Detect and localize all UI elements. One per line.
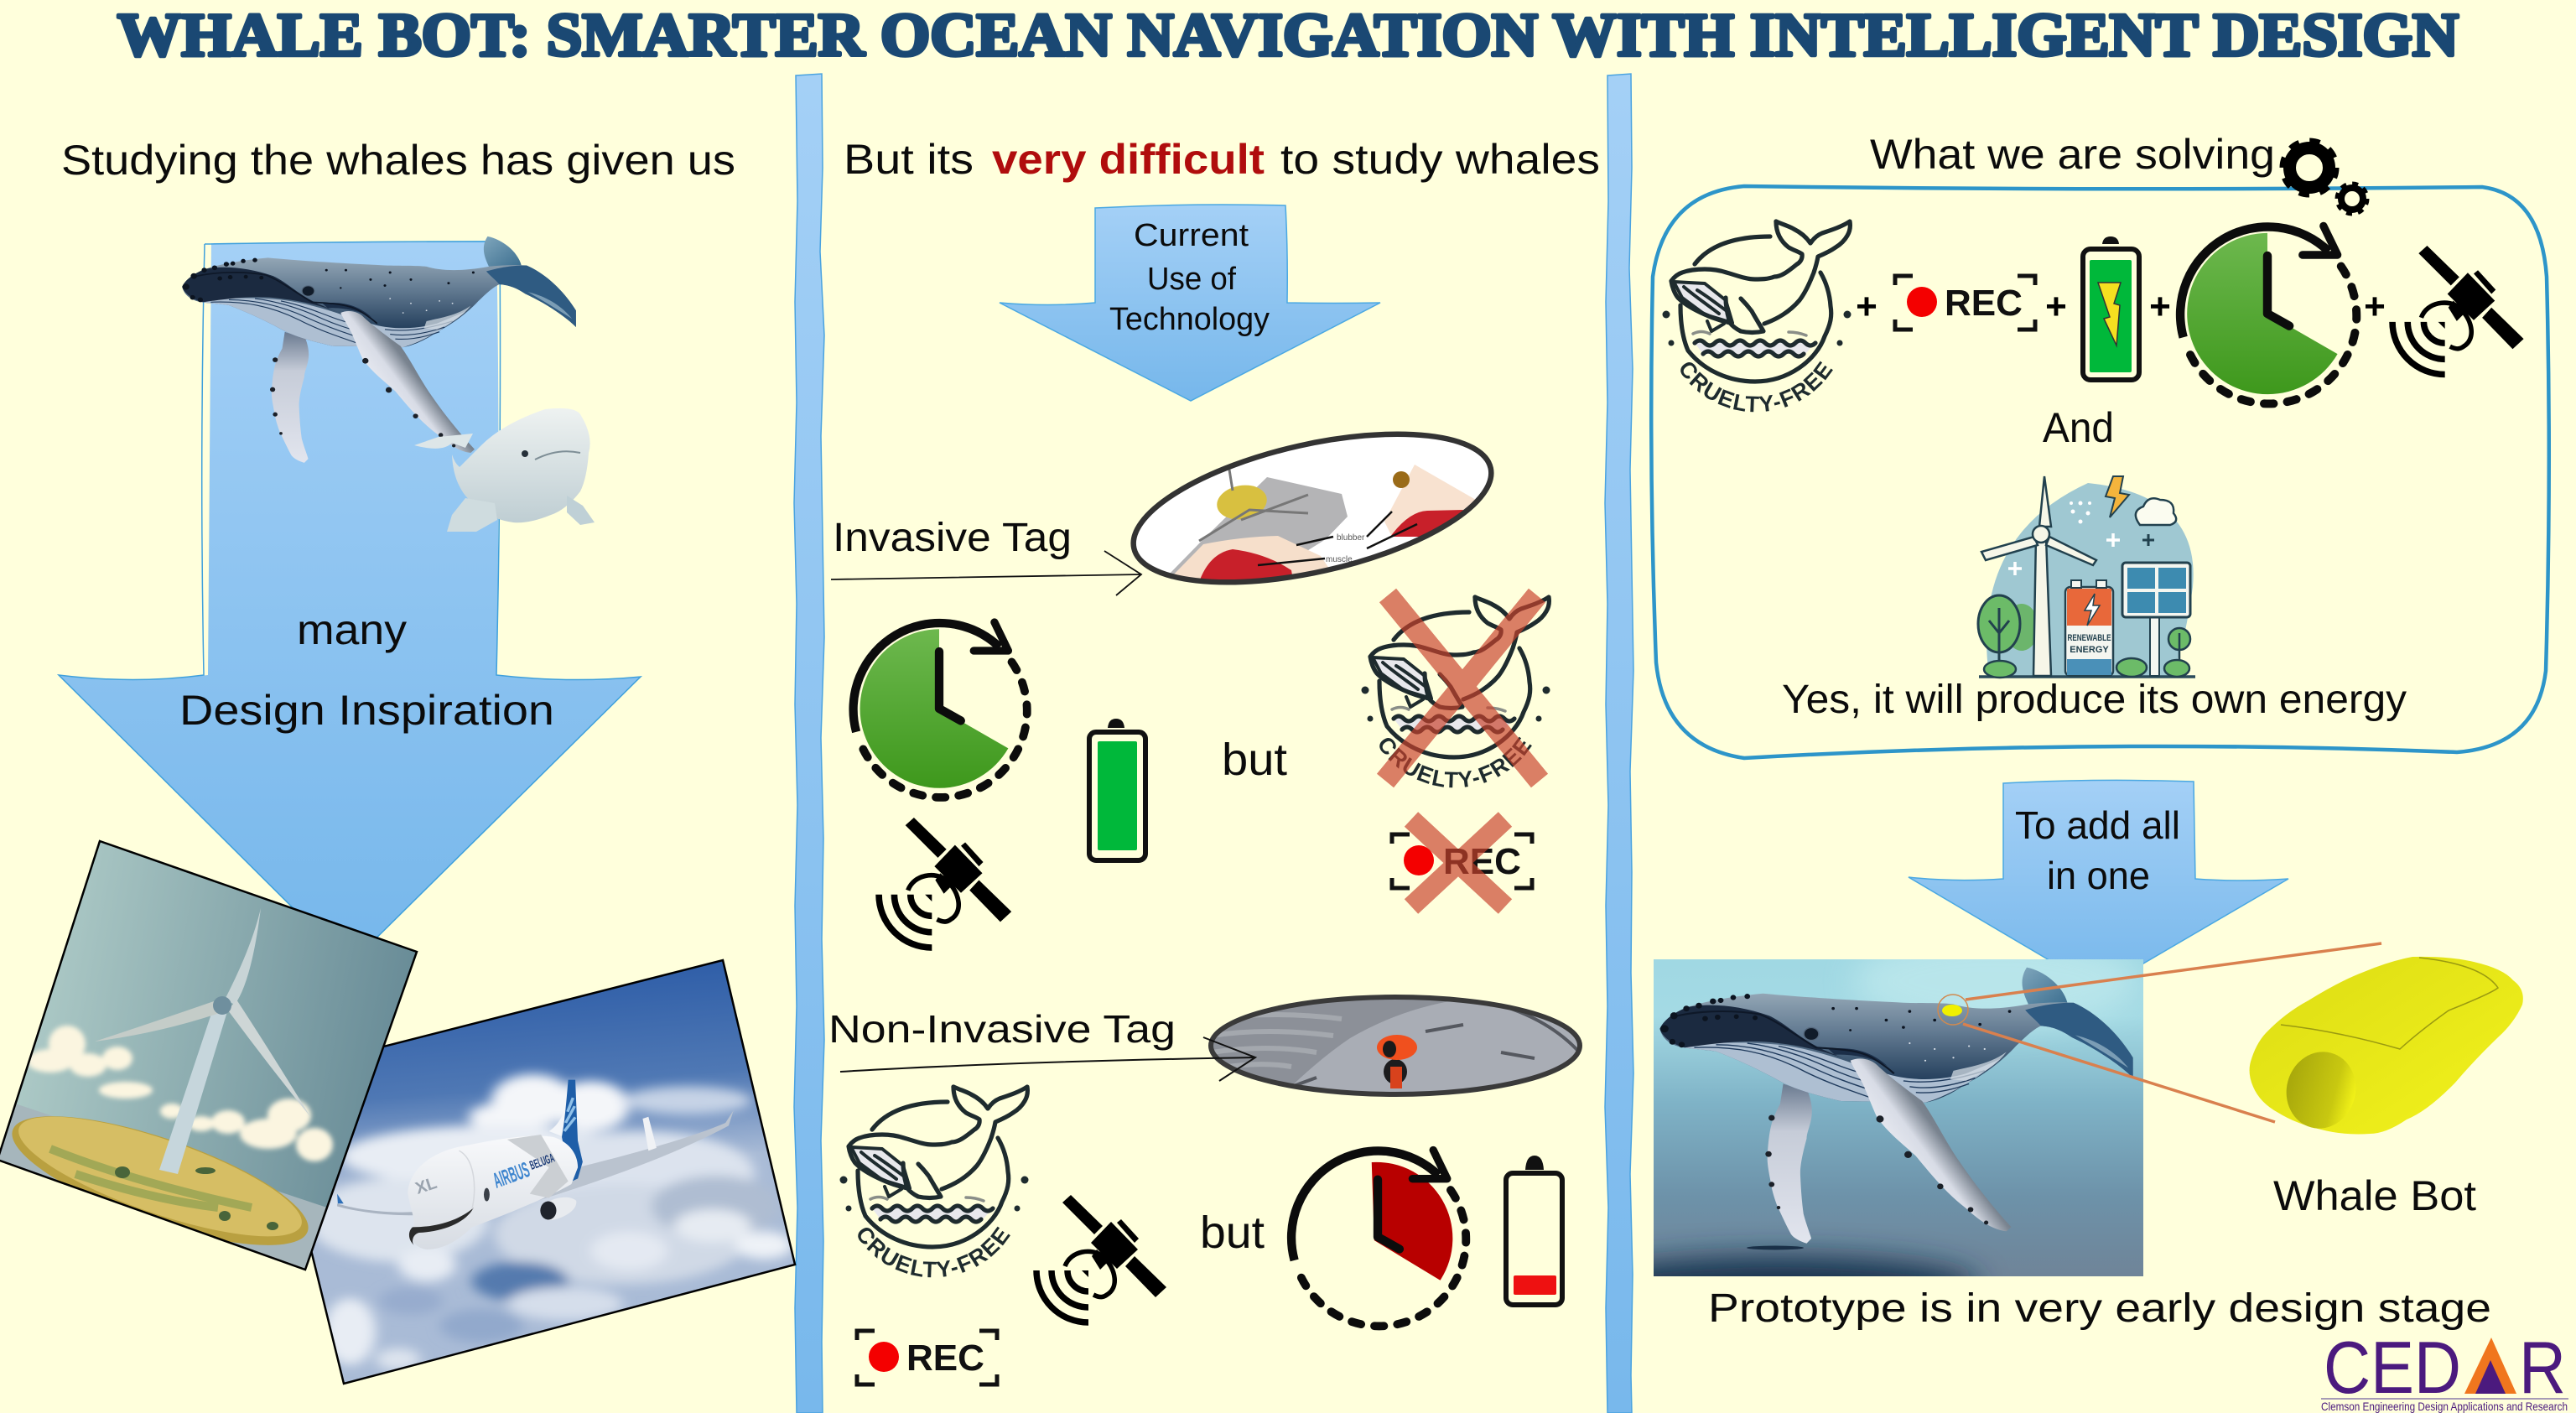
heading: very difficult to study whales: to study whales — [1280, 136, 1600, 183]
icon: charging battery — [2083, 236, 2139, 380]
label: invasive tag: Invasive Tag — [833, 516, 1072, 560]
photo: beluga airplane: XL — [413, 1174, 439, 1198]
icon: record crossed out — [1392, 819, 1532, 907]
callout lines to whale bot — [1963, 943, 2381, 1122]
icon: cruelty-free: CRUELTY-FREE — [858, 1226, 1010, 1278]
heading: very difficult to study whales: very difficult — [992, 136, 1265, 183]
label: and: And — [2043, 404, 2114, 451]
heading: what we are solving: What we are solving — [1870, 131, 2275, 178]
arrow: current use of technology: Use of — [1147, 262, 1236, 297]
image: yellow whale bot prototype — [2250, 957, 2523, 1136]
label: non-invasive tag: Non-Invasive Tag — [828, 1007, 1176, 1051]
photo: beluga airplane: BELUGA — [528, 1151, 557, 1173]
divider: right column separator — [1605, 74, 1633, 1413]
icon: record crossed out: REC — [1443, 841, 1521, 882]
icon: satellite — [879, 818, 1011, 948]
title: WHALE BOT: SMARTER OCEAN NAVIGATION WITH INTELLIGENT DESIGN — [117, 1, 2459, 69]
label: whale bot: Whale Bot — [2273, 1172, 2476, 1219]
arrow: to add all in one — [1909, 780, 2288, 990]
arrow: to add all in one: in one — [2047, 854, 2150, 897]
icon: cruelty-free crossed out: CRUELTY-FREE — [1379, 736, 1532, 788]
label: many: many — [297, 606, 407, 653]
panel: design inspiration — [0, 137, 795, 1384]
icon: record — [857, 1331, 997, 1384]
icon: cruelty-free crossed out — [1362, 589, 1551, 788]
caption: produce its own energy: Yes, it will produce its own energy — [1782, 678, 2407, 722]
icon: cruelty-free — [840, 1084, 1030, 1278]
icon: cruelty-free — [1662, 219, 1852, 413]
image: invasive tag diagram: blubber — [1337, 533, 1365, 543]
icon: gears — [2283, 142, 2367, 214]
heading: studying the whales: Studying the whales has given us — [61, 137, 735, 184]
logo: CEDAR: R — [2519, 1326, 2566, 1409]
icon: renewable energy — [1978, 476, 2195, 678]
label: but: but — [1200, 1208, 1265, 1258]
icon: cruelty-free: CRUELTY-FREE — [1680, 361, 1833, 413]
plus sign: + — [2045, 286, 2067, 327]
heading: very difficult to study whales: But its — [844, 136, 974, 183]
plus sign: + — [2364, 286, 2386, 327]
photo: beluga airplane — [268, 960, 795, 1384]
arrow: current use of technology: Current — [1134, 218, 1249, 253]
divider: left column separator — [794, 74, 824, 1413]
icon: clock long duration — [854, 622, 1027, 797]
icon: record: REC — [906, 1338, 984, 1379]
photo: beluga airplane: AIRBUS — [490, 1156, 532, 1193]
arrow: current use of technology: Technology — [1109, 302, 1270, 337]
whale: humpback — [182, 236, 576, 463]
icon: record: REC — [1945, 283, 2023, 324]
heading: very difficult to study whales — [844, 136, 1600, 183]
photo: humpback whale with tag — [1654, 959, 2143, 1276]
panel: what we are solving — [1649, 131, 2568, 1413]
icon: satellite — [2392, 246, 2524, 375]
label: but: but — [1222, 735, 1287, 785]
photo: wind turbine — [0, 841, 417, 1271]
rounded requirements box — [1651, 186, 2549, 758]
plus sign: + — [1856, 286, 1877, 327]
panel: difficulty of studying whales — [828, 136, 1600, 1387]
image: invasive tag diagram — [1130, 431, 1494, 585]
icon: satellite — [1036, 1195, 1166, 1322]
label: design inspiration: Design Inspiration — [179, 687, 554, 734]
arrow: to invasive tag — [831, 551, 1141, 595]
arrow: to add all in one: To add all — [2015, 803, 2180, 847]
arrow: to non-invasive tag — [840, 1037, 1255, 1081]
icon: renewable energy: ENERGY — [2070, 645, 2109, 655]
arrow: design inspiration — [59, 241, 641, 964]
icon: clock short duration — [1291, 1151, 1466, 1326]
logo: CEDAR — [2321, 1326, 2568, 1413]
icon: battery low — [1506, 1156, 1562, 1305]
image: invasive tag diagram: muscle — [1326, 555, 1353, 564]
icon: renewable energy: RENEWABLE — [2068, 633, 2111, 643]
plus sign: + — [2149, 286, 2171, 327]
caption: prototype stage: Prototype is in very early design stage — [1708, 1286, 2491, 1331]
logo: CEDAR: CED — [2324, 1326, 2461, 1409]
image: non-invasive tag on whale — [1208, 994, 1585, 1099]
icon: record — [1895, 276, 2035, 330]
arrow: current use of technology — [1000, 205, 1380, 401]
icon: battery full — [1089, 719, 1145, 860]
whale: beluga — [414, 408, 595, 532]
icon: clock long duration — [2180, 226, 2356, 403]
